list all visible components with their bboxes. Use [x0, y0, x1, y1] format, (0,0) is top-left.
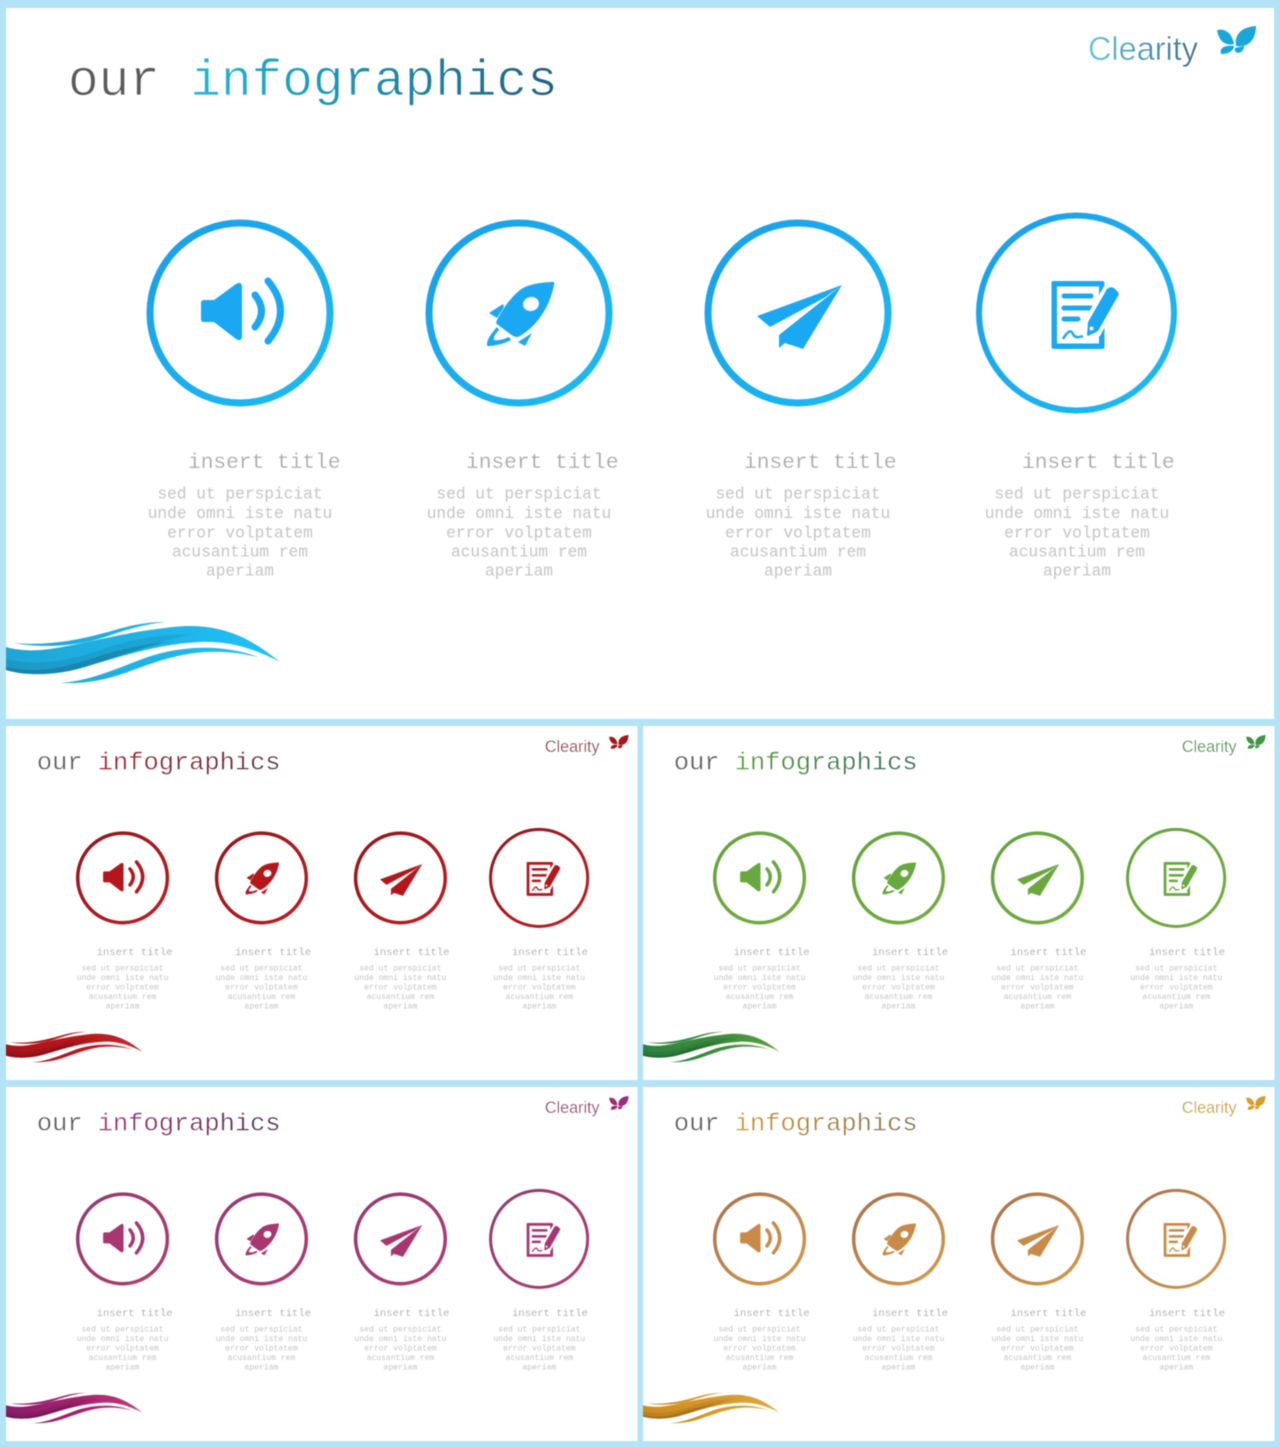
icon: speaker [150, 223, 330, 403]
column 4 text: error volptatem [503, 984, 576, 993]
title: our infographics [37, 1109, 281, 1138]
column 2 text: aperiam [245, 1003, 279, 1012]
column 3 text: acusantium rem [1004, 993, 1071, 1002]
column 1 text: insert title [97, 1308, 173, 1320]
column 1 text: sed ut perspiciat [718, 964, 801, 973]
column 1 text: aperiam [106, 1364, 140, 1373]
column 4 text: unde omni iste natu [493, 1335, 585, 1344]
column 4 text [1130, 1308, 1225, 1373]
column 2 text: aperiam [485, 562, 553, 580]
column 2 text: insert title [466, 451, 619, 475]
panel: green slide [643, 726, 1274, 1080]
column 2 text [216, 1308, 311, 1373]
column 1 text [714, 1308, 810, 1373]
column 1 text: error volptatem [723, 1345, 796, 1354]
column 3 text: error volptatem [364, 1345, 437, 1354]
logo: Clearity [545, 738, 600, 756]
icon: rocket [429, 223, 609, 403]
column 3 text: sed ut perspiciat [359, 1325, 441, 1334]
column 3 text: sed ut perspiciat [996, 1325, 1078, 1334]
wave [6, 622, 280, 683]
column 4 text [493, 1308, 588, 1373]
column 3 text: unde omni iste natu [992, 974, 1083, 983]
column 2 text: error volptatem [862, 1345, 935, 1354]
icon: speaker [715, 1194, 804, 1284]
column 3 text: sed ut perspiciat [715, 486, 881, 504]
column 1 text: acusantium rem [172, 544, 308, 562]
column 3 text: aperiam [1021, 1364, 1054, 1373]
column 3 text: aperiam [1021, 1003, 1054, 1012]
column 1 text: sed ut perspiciat [718, 1325, 801, 1334]
column 2 text: sed ut perspiciat [857, 1325, 940, 1334]
logo [1088, 26, 1256, 67]
icon: speaker [78, 833, 167, 923]
panel: orange slide [643, 1087, 1274, 1441]
logo: Clearity [1088, 30, 1198, 67]
column 4 text: acusantium rem [506, 993, 573, 1002]
column 1 text: aperiam [106, 1003, 140, 1012]
column 1 text [77, 1308, 173, 1373]
icon: rocket [854, 1194, 943, 1284]
column 1 text: error volptatem [723, 984, 796, 993]
icon: document [1128, 1190, 1225, 1287]
icon: rocket [217, 833, 306, 923]
column 3 text: insert title [1011, 1308, 1086, 1320]
column 2 text: sed ut perspiciat [220, 964, 303, 973]
column 4 text: aperiam [1159, 1003, 1193, 1012]
column 3 text [992, 1308, 1086, 1373]
column 4 text: unde omni iste natu [493, 974, 585, 983]
column 1 text: aperiam [206, 562, 274, 580]
column 4 text: unde omni iste natu [1130, 974, 1222, 983]
column 4 text: unde omni iste natu [1130, 1335, 1222, 1344]
column 3 text [355, 1308, 449, 1373]
column 4 text: sed ut perspiciat [994, 486, 1160, 504]
panel: blue slide [6, 8, 1274, 719]
wave [643, 1393, 779, 1423]
column 1 text: unde omni iste natu [714, 974, 806, 983]
column 2 text: error volptatem [862, 984, 935, 993]
column 2 text: error volptatem [225, 1345, 298, 1354]
column 1 text: insert title [97, 947, 173, 959]
icon: document [1128, 829, 1225, 926]
column 4 text: aperiam [522, 1003, 556, 1012]
logo [545, 735, 628, 756]
column 3 text: insert title [374, 947, 449, 959]
column 2 text [427, 451, 619, 580]
column 4 text [985, 451, 1175, 580]
column 4 text: acusantium rem [506, 1354, 573, 1363]
column 3 text: sed ut perspiciat [359, 964, 441, 973]
icon: document [491, 829, 588, 926]
column 3 text: aperiam [384, 1364, 417, 1373]
column 2 text: unde omni iste natu [853, 974, 945, 983]
column 1 text: sed ut perspiciat [81, 964, 164, 973]
column 1 text: acusantium rem [726, 993, 794, 1002]
column 3 text: error volptatem [364, 984, 437, 993]
column 3 text: insert title [374, 1308, 449, 1320]
column 3 text: error volptatem [1001, 1345, 1074, 1354]
column 1 text: error volptatem [86, 1345, 159, 1354]
column 3 text: sed ut perspiciat [996, 964, 1078, 973]
column 1 text: aperiam [743, 1364, 777, 1373]
column 3 text: error volptatem [725, 524, 871, 542]
column 2 text [216, 947, 311, 1012]
column 1 text: unde omni iste natu [148, 505, 332, 523]
column 3 text: unde omni iste natu [355, 974, 446, 983]
title: our infographics [674, 1109, 918, 1138]
column 4 text: sed ut perspiciat [498, 964, 580, 973]
wave [6, 1032, 142, 1062]
column 2 text: unde omni iste natu [853, 1335, 945, 1344]
column 2 text: aperiam [245, 1364, 279, 1373]
icon: document [979, 216, 1174, 410]
column 4 text [493, 947, 588, 1012]
column 2 text: acusantium rem [865, 1354, 932, 1363]
column 3 text: unde omni iste natu [355, 1335, 446, 1344]
column 2 text: acusantium rem [865, 993, 932, 1002]
column 4 text: sed ut perspiciat [1135, 964, 1217, 973]
column 1 text: aperiam [743, 1003, 777, 1012]
title: our infographics [68, 54, 558, 111]
column 1 text: unde omni iste natu [714, 1335, 806, 1344]
icon: paper plane [993, 1194, 1082, 1284]
column 1 text: unde omni iste natu [77, 974, 169, 983]
column 2 text [853, 947, 948, 1012]
column 1 text: insert title [734, 1308, 810, 1320]
column 4 text: error volptatem [503, 1345, 576, 1354]
column 4 text: insert title [512, 947, 588, 959]
column 3 text [706, 451, 897, 580]
logo: Clearity [1182, 1099, 1237, 1117]
column 3 text: insert title [744, 451, 897, 475]
column 1 text: insert title [734, 947, 810, 959]
title: our infographics [37, 748, 281, 777]
column 2 text: sed ut perspiciat [436, 486, 602, 504]
icon: rocket [854, 833, 943, 923]
column 3 text [355, 947, 449, 1012]
column 2 text: insert title [235, 1308, 311, 1320]
column 3 text: aperiam [384, 1003, 417, 1012]
column 3 text: unde omni iste natu [992, 1335, 1083, 1344]
column 1 text: acusantium rem [726, 1354, 794, 1363]
logo [1182, 1096, 1266, 1117]
logo [545, 1096, 628, 1117]
column 4 text: insert title [1149, 1308, 1225, 1320]
column 4 text: acusantium rem [1143, 1354, 1210, 1363]
column 1 text: insert title [188, 451, 341, 475]
column 4 text: acusantium rem [1009, 544, 1145, 562]
column 4 text: insert title [1022, 451, 1175, 475]
column 3 text: acusantium rem [367, 993, 434, 1002]
column 2 text: sed ut perspiciat [857, 964, 940, 973]
column 2 text: aperiam [882, 1364, 916, 1373]
column 2 text: sed ut perspiciat [220, 1325, 303, 1334]
column 4 text: aperiam [1159, 1364, 1193, 1373]
column 2 text: unde omni iste natu [216, 1335, 308, 1344]
column 2 text: error volptatem [446, 524, 592, 542]
logo [1182, 735, 1266, 756]
column 4 text: error volptatem [1140, 984, 1213, 993]
column 1 text: error volptatem [167, 524, 313, 542]
icon: speaker [715, 833, 804, 923]
wave [643, 1032, 779, 1062]
column 2 text: error volptatem [225, 984, 298, 993]
column 4 text: aperiam [1043, 562, 1111, 580]
column 3 text [992, 947, 1086, 1012]
column 4 text: insert title [1149, 947, 1225, 959]
logo: Clearity [1182, 738, 1237, 756]
column 1 text: acusantium rem [89, 993, 157, 1002]
column 1 text: error volptatem [86, 984, 159, 993]
column 4 text: error volptatem [1140, 1345, 1213, 1354]
column 2 text: insert title [872, 947, 948, 959]
column 3 text: acusantium rem [1004, 1354, 1071, 1363]
column 2 text [853, 1308, 948, 1373]
column 4 text: acusantium rem [1143, 993, 1210, 1002]
column 3 text: unde omni iste natu [706, 505, 890, 523]
column 3 text: acusantium rem [367, 1354, 434, 1363]
icon: rocket [217, 1194, 306, 1284]
column 2 text: insert title [235, 947, 311, 959]
column 3 text: aperiam [764, 562, 832, 580]
column 4 text [1130, 947, 1225, 1012]
column 1 text: acusantium rem [89, 1354, 157, 1363]
column 3 text: insert title [1011, 947, 1086, 959]
wave [6, 1393, 142, 1423]
column 2 text: acusantium rem [451, 544, 587, 562]
icon: paper plane [993, 833, 1082, 923]
icon: document [491, 1190, 588, 1287]
icon: speaker [78, 1194, 167, 1284]
column 4 text: insert title [512, 1308, 588, 1320]
logo: Clearity [545, 1099, 600, 1117]
column 2 text: insert title [872, 1308, 948, 1320]
column 2 text: acusantium rem [228, 993, 295, 1002]
column 3 text: acusantium rem [730, 544, 866, 562]
panel: purple slide [6, 1087, 637, 1441]
column 2 text: unde omni iste natu [216, 974, 308, 983]
column 2 text: aperiam [882, 1003, 916, 1012]
column 1 text: sed ut perspiciat [157, 486, 323, 504]
column 4 text: aperiam [522, 1364, 556, 1373]
title: our infographics [674, 748, 918, 777]
column 1 text [148, 451, 341, 580]
column 1 text: unde omni iste natu [77, 1335, 169, 1344]
icon: paper plane [708, 223, 888, 403]
icon: paper plane [356, 1194, 445, 1284]
column 4 text: sed ut perspiciat [1135, 1325, 1217, 1334]
column 4 text: sed ut perspiciat [498, 1325, 580, 1334]
column 1 text: sed ut perspiciat [81, 1325, 164, 1334]
column 1 text [77, 947, 173, 1012]
column 4 text: unde omni iste natu [985, 505, 1169, 523]
column 4 text: error volptatem [1004, 524, 1150, 542]
column 2 text: unde omni iste natu [427, 505, 611, 523]
icon: paper plane [356, 833, 445, 923]
column 2 text: acusantium rem [228, 1354, 295, 1363]
column 3 text: error volptatem [1001, 984, 1074, 993]
panel: red slide [6, 726, 637, 1080]
column 1 text [714, 947, 810, 1012]
